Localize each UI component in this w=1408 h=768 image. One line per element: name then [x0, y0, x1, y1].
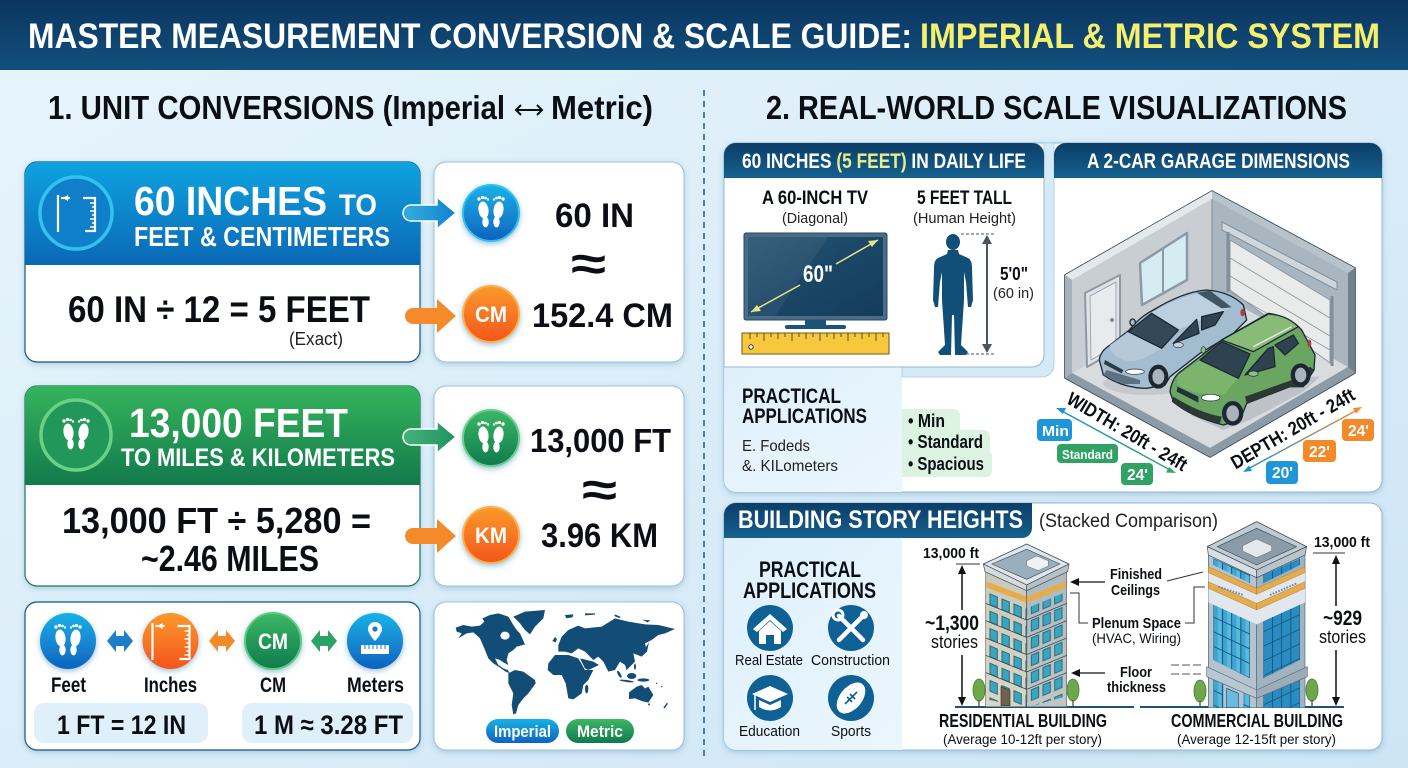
residential height annotation: stories	[931, 632, 978, 652]
residential height annotation: 13,000 ft	[923, 545, 979, 562]
TV heading	[762, 188, 868, 227]
unit labels: Meters	[347, 674, 404, 697]
callout: floor thickness: thickness	[1107, 679, 1166, 696]
arrow: to feet	[403, 197, 456, 229]
pill: 20 blue	[1266, 461, 1298, 484]
heading: unit conversions: Metric)	[551, 89, 653, 126]
panel: building story heights	[724, 503, 1382, 750]
commercial building	[1207, 522, 1307, 708]
icon: KM circle	[463, 507, 519, 563]
panel: 60 inches result	[434, 162, 684, 362]
icon: ruler	[742, 333, 889, 354]
label: commercial building	[1171, 711, 1343, 747]
panel: 60 inches to feet and centimeters	[25, 162, 420, 362]
icon: CM circle: CM	[475, 302, 507, 327]
result: 152.4 CM: 152.4 CM	[532, 297, 673, 335]
panel: practical applications	[724, 367, 992, 492]
pill: 24 green	[1121, 463, 1153, 485]
height label: 5'0"	[1000, 264, 1028, 284]
panel: unit relationships	[25, 602, 420, 750]
label: Education	[739, 723, 800, 740]
label: residential building: (Average 10-12ft per story)	[943, 731, 1102, 747]
legend: metric: Metric	[577, 722, 623, 741]
title banner: IMPERIAL & METRIC SYSTEM	[920, 17, 1380, 56]
unit labels: Inches	[144, 674, 197, 697]
icon: television: 60"	[803, 261, 833, 288]
list: sizes: • Spacious	[908, 454, 984, 474]
icon: CM: CM	[258, 629, 288, 654]
gap strip between panels	[902, 143, 1054, 377]
heading: unit conversions: 1. UNIT CONVERSIONS (Imperial	[48, 89, 505, 126]
practical applications heading: PRACTICAL	[759, 557, 861, 582]
formula: ~2.46 MILES	[141, 538, 319, 579]
card title	[134, 178, 390, 252]
approximately sign: ≈	[571, 238, 606, 291]
card title	[121, 400, 395, 472]
depth label: DEPTH: 20ft - 24ft	[1228, 385, 1359, 474]
pill: 1 m to feet	[242, 703, 413, 743]
icon: ruler	[40, 177, 112, 249]
panel: 13,000 feet result	[434, 386, 684, 586]
pill: 1 ft = 12 in: 1 FT = 12 IN	[57, 710, 186, 740]
panel header	[1054, 143, 1382, 178]
legend: metric	[566, 719, 634, 743]
practical heading: APPLICATIONS	[742, 405, 867, 428]
icon: CM	[245, 613, 301, 669]
pill: 20 blue: 20'	[1272, 465, 1293, 482]
practical heading	[742, 385, 867, 428]
panel heading: BUILDING STORY HEIGHTS	[738, 506, 1023, 534]
icon: feet circle	[463, 185, 519, 241]
TV heading: A 60-INCH TV	[762, 188, 868, 209]
height label	[993, 264, 1034, 302]
panel subtitle: (Stacked Comparison)	[1039, 511, 1218, 532]
icon: education	[739, 675, 800, 740]
icon: KM circle: KM	[475, 523, 507, 548]
callout: finished ceilings	[1070, 566, 1203, 599]
pill: standard: Standard	[1062, 447, 1113, 462]
unit labels: Feet	[51, 674, 86, 697]
result: 13,000 FT: 13,000 FT	[530, 422, 671, 459]
residential building	[983, 544, 1069, 707]
panel: world map	[434, 602, 684, 750]
arrow: to centimeters	[405, 299, 456, 333]
label: commercial building: COMMERCIAL BUILDING	[1171, 711, 1343, 731]
TV heading: (Diagonal)	[782, 210, 848, 227]
callout: floor thickness: Floor	[1120, 664, 1152, 681]
pill: 22 orange: 22'	[1309, 444, 1330, 461]
list: sizes: • Standard	[908, 432, 983, 452]
pill: min: Min	[1042, 423, 1069, 440]
practical notes: &. KILometers	[742, 458, 838, 475]
arrow: to feet	[403, 421, 456, 453]
trees	[973, 679, 1318, 707]
icon: inches	[142, 613, 198, 669]
pill: min	[1037, 419, 1072, 441]
pill: 24 orange	[1342, 419, 1374, 441]
person heading	[913, 188, 1016, 227]
commercial height annotation: 13,000 ft	[1314, 534, 1370, 551]
icon: feet	[41, 400, 111, 470]
formula: 60 IN ÷ 12 = 5 FEET	[68, 289, 370, 330]
callout: finished ceilings: Ceilings	[1111, 582, 1160, 599]
ground line	[955, 706, 1344, 708]
result: 3.96 KM: 3.96 KM	[541, 517, 658, 555]
residential height annotation	[923, 545, 980, 706]
panel header	[724, 143, 1044, 178]
gray sedan	[1099, 290, 1247, 395]
card title: TO	[339, 189, 377, 222]
window	[1140, 233, 1187, 305]
label: residential building	[939, 711, 1107, 747]
practical heading: PRACTICAL	[742, 385, 841, 408]
garage room	[1065, 191, 1355, 457]
card header	[25, 162, 420, 265]
pill: 1 m to feet: 1 M ≈ 3.28 FT	[254, 710, 403, 740]
callout: plenum space: (HVAC, Wiring)	[1092, 630, 1181, 646]
result: 60 IN: 60 IN	[555, 197, 634, 235]
icon: sports	[828, 675, 874, 740]
practical notes	[742, 438, 838, 475]
callout: plenum space	[1070, 587, 1205, 646]
door	[1085, 275, 1120, 367]
label: commercial building: (Average 12-15ft per story)	[1177, 731, 1336, 747]
title banner: MASTER MEASUREMENT CONVERSION & SCALE GUIDE:	[28, 17, 912, 56]
arrow: cm to meters	[311, 630, 337, 652]
arrow: feet to inches	[107, 630, 133, 652]
height arrow	[961, 234, 994, 354]
icon: television	[744, 233, 887, 329]
icon: feet	[40, 613, 96, 669]
title banner	[0, 0, 1408, 70]
pill: 22 orange	[1303, 440, 1336, 462]
label: residential building: RESIDENTIAL BUILDING	[939, 711, 1107, 731]
arrow: inches to cm	[209, 630, 235, 652]
panel: 60 inches in daily life	[724, 143, 1044, 367]
panel heading	[724, 503, 1032, 538]
practical applications heading: APPLICATIONS	[743, 578, 876, 603]
card title: 13,000 FEET	[129, 400, 348, 446]
green SUV	[1170, 313, 1320, 430]
panel: 13,000 feet to miles and kilometers	[25, 386, 420, 586]
panel header: 60 INCHES (5 FEET) IN DAILY LIFE	[742, 150, 1026, 173]
panel header: A 2-CAR GARAGE DIMENSIONS	[1087, 150, 1350, 173]
residential height annotation: ~1,300	[925, 612, 979, 635]
left applications column	[724, 538, 902, 750]
pill: 24 green: 24'	[1127, 467, 1148, 484]
commercial height annotation	[1313, 534, 1370, 706]
formula	[62, 500, 371, 579]
garage door	[1222, 222, 1337, 366]
callout: plenum space: Plenum Space	[1092, 615, 1181, 632]
panel: upper right container	[724, 143, 1382, 492]
person heading: (Human Height)	[913, 210, 1016, 227]
label: Sports	[831, 723, 871, 740]
unit labels: CM	[260, 674, 286, 697]
icon: CM circle	[463, 286, 519, 342]
card title: FEET & CENTIMETERS	[134, 221, 390, 252]
arrow: to kilometers	[405, 519, 456, 553]
pill: 24 orange: 24'	[1348, 423, 1369, 440]
list: sizes	[902, 409, 992, 477]
unit labels	[51, 674, 404, 697]
card title: TO MILES & KILOMETERS	[121, 444, 395, 472]
width label: WIDTH: 20ft - 24ft	[1063, 389, 1191, 476]
pill: 1 ft = 12 in	[34, 703, 208, 743]
label: Construction	[811, 652, 890, 669]
legend: imperial: Imperial	[494, 722, 551, 741]
person heading: 5 FEET TALL	[917, 188, 1012, 209]
icon: construction	[811, 605, 890, 669]
list: sizes: • Min	[908, 411, 945, 431]
height label: (60 in)	[993, 285, 1034, 302]
icon: feet circle	[463, 410, 519, 466]
icon: human silhouette	[933, 234, 973, 355]
commercial height annotation: ~929	[1323, 607, 1362, 630]
approximately sign: ≈	[582, 464, 617, 517]
label: Real Estate	[735, 652, 803, 669]
icon: meters	[347, 613, 403, 669]
width arrow	[1056, 408, 1176, 473]
note: exact: (Exact)	[289, 329, 343, 349]
panel: 2-car garage	[1037, 143, 1382, 485]
formula: 13,000 FT ÷ 5,280 =	[62, 500, 371, 541]
card header	[25, 386, 420, 485]
world map	[456, 610, 675, 714]
depth arrow	[1243, 407, 1362, 472]
card title: 60 INCHES	[134, 178, 327, 224]
practical notes: E. Fodeds	[742, 438, 810, 455]
icon: real estate	[735, 605, 803, 669]
callout: floor thickness	[1071, 664, 1203, 696]
callout: finished ceilings: Finished	[1110, 566, 1162, 583]
commercial height annotation: stories	[1319, 627, 1366, 647]
practical applications heading	[743, 557, 876, 603]
